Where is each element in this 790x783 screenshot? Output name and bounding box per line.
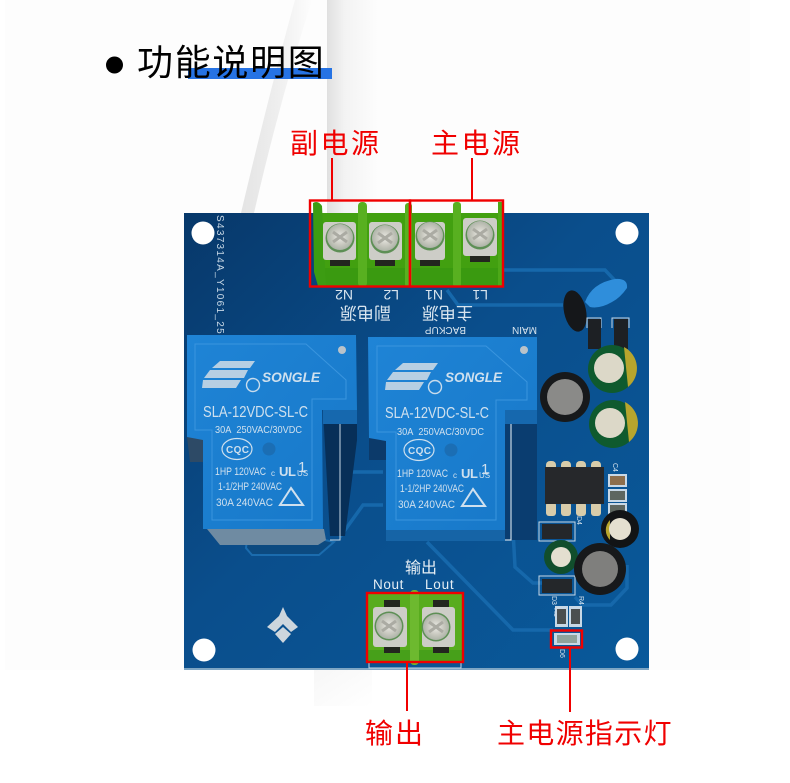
small capacitors — [544, 510, 639, 574]
title — [106, 42, 332, 83]
label: main power: 主电源 — [431, 128, 523, 159]
relay markings: 1 — [298, 459, 306, 476]
relay right — [368, 337, 537, 541]
diodes top — [587, 318, 629, 328]
label: main power — [431, 128, 523, 200]
circuit board — [184, 213, 649, 670]
silkscreen: upside-down terminal labels: MAIN — [512, 324, 537, 335]
label: output — [365, 662, 425, 749]
output terminal silk outline — [369, 660, 461, 668]
inductor top — [540, 372, 590, 422]
label: backup power: 副电源 — [290, 128, 382, 159]
green capacitors — [588, 345, 638, 448]
relay markings: SONGLE — [445, 369, 503, 385]
label: output: 输出 — [365, 718, 425, 749]
silkscreen: board code: S437314A_Y1061_2505 — [214, 215, 225, 349]
silkscreen: lower right labels: R3 — [552, 608, 559, 617]
red highlight boxes — [310, 200, 582, 662]
black disc component — [560, 288, 590, 334]
silkscreen: lower right labels — [550, 463, 618, 658]
silkscreen: output label: Nout — [373, 577, 404, 592]
relay markings: US — [479, 471, 490, 480]
relay markings: SLA-12VDC-SL-C — [203, 404, 308, 421]
inductor bottom — [574, 543, 626, 595]
relay markings: 1 — [481, 461, 489, 478]
silkscreen: upside-down terminal labels: BACKUP — [425, 324, 466, 335]
relay markings: 30A 250VAC/30VDC — [397, 426, 484, 438]
relay markings — [203, 369, 321, 509]
relay markings: UL — [279, 464, 296, 479]
blue varistor — [585, 279, 627, 307]
silkscreen: output label — [373, 559, 454, 592]
relay markings: 1-1/2HP 240VAC — [400, 483, 464, 495]
silkscreen: lower right labels: D3 — [550, 596, 557, 605]
relay markings: SONGLE — [262, 369, 321, 385]
screws — [323, 218, 497, 266]
title bullet — [106, 56, 123, 74]
silkscreen: lower right labels: C4 — [611, 463, 618, 472]
silkscreen: lower right labels: D6 — [558, 649, 565, 658]
silkscreen: upside-down terminal labels: 主电源 — [422, 303, 473, 322]
indicator LED — [554, 633, 580, 645]
relay shadow — [246, 540, 334, 555]
title underline — [188, 68, 332, 79]
silkscreen: upside-down terminal labels: N1 — [425, 287, 443, 303]
output terminal block — [368, 590, 462, 665]
input terminal block — [313, 202, 503, 287]
screws — [373, 607, 407, 647]
relay markings: CQC — [226, 445, 249, 456]
relay markings: 30A 240VAC — [398, 499, 455, 511]
silkscreen: lower right labels: D4 — [575, 516, 582, 525]
silkscreen: upside-down terminal labels: L1 — [472, 287, 488, 303]
relay markings: US — [297, 469, 308, 478]
silkscreen: upside-down terminal labels: L2 — [383, 287, 399, 303]
relay brand logo — [202, 361, 255, 388]
silkscreen: output label: 输出 — [405, 559, 437, 577]
relay markings: 1-1/2HP 240VAC — [218, 481, 282, 493]
small SMD parts — [539, 474, 627, 627]
silkscreen: output label: Lout — [425, 577, 454, 592]
relay markings: 1HP 120VAC — [397, 468, 448, 480]
relay markings: c — [271, 469, 275, 478]
IC chip — [545, 461, 604, 516]
label: backup power — [290, 128, 382, 200]
relay markings: UL — [461, 466, 478, 481]
logo — [267, 607, 298, 643]
electronic components — [539, 279, 639, 645]
mounting holes — [192, 222, 638, 662]
relay markings: 30A 250VAC/30VDC — [215, 424, 302, 436]
relay markings: 30A 240VAC — [216, 497, 273, 509]
relay left — [187, 335, 357, 555]
silkscreen: lower right labels: R4 — [577, 596, 584, 605]
title text: 功能说明图 — [137, 42, 326, 83]
silkscreen: upside-down terminal labels: N2 — [335, 287, 353, 303]
relay markings: c — [453, 471, 457, 480]
relay markings: 1HP 120VAC — [215, 466, 266, 478]
silkscreen: upside-down terminal labels — [335, 287, 537, 335]
relay markings: SLA-12VDC-SL-C — [385, 405, 489, 422]
relay markings: CQC — [408, 446, 431, 457]
label: main power indicator: 主电源指示灯 — [497, 718, 673, 749]
copper traces — [340, 270, 627, 630]
silkscreen: upside-down terminal labels: 副电源 — [340, 303, 391, 322]
relay markings — [385, 369, 503, 511]
relay brand logo — [385, 363, 438, 390]
